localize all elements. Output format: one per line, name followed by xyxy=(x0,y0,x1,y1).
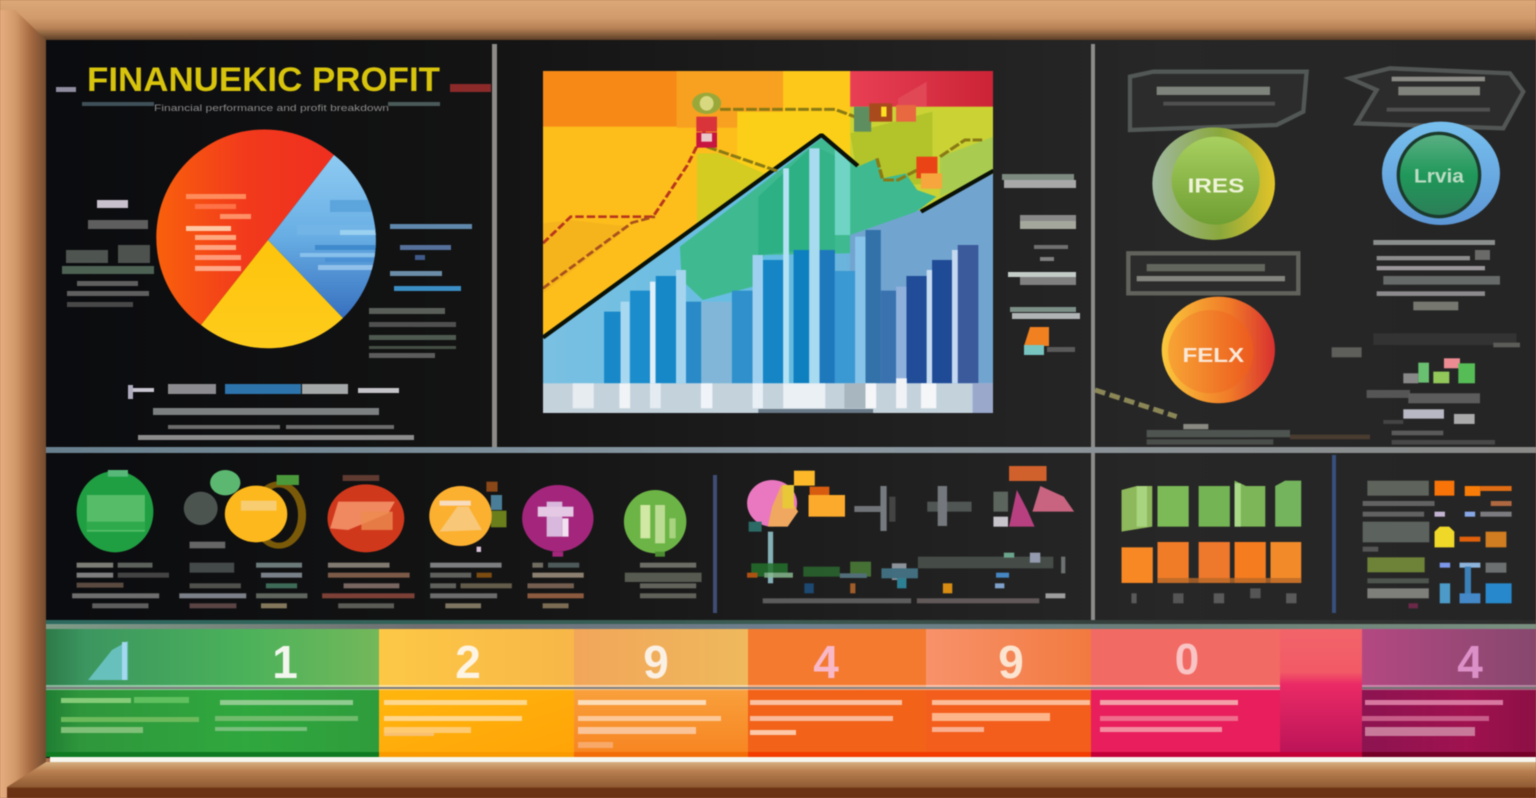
icon: pink bar and orange marker xyxy=(1009,466,1074,527)
green mountain xyxy=(680,138,936,300)
step 2 yellow: 2 xyxy=(455,636,481,688)
trend line and footnote xyxy=(1095,390,1370,445)
orange bars xyxy=(1122,542,1301,583)
bars xyxy=(604,148,978,383)
label xyxy=(179,563,307,608)
subtitle: Financial performance and profit breakdown xyxy=(154,103,389,113)
panel: mixed chart xyxy=(747,466,1074,603)
step divider line xyxy=(46,685,1536,690)
label xyxy=(430,563,512,608)
panel: main area and bar chart xyxy=(543,71,994,414)
panel: green and orange bars xyxy=(1122,481,1301,603)
step 3 orange xyxy=(574,629,748,757)
panel: numbered steps band xyxy=(46,629,1536,757)
green bars xyxy=(1122,481,1301,532)
icon: green badge xyxy=(1152,127,1275,240)
icon: orange badge: FELX xyxy=(1182,345,1245,367)
red line 1 xyxy=(543,127,707,243)
step 8 magenta: 4 xyxy=(1457,636,1483,688)
heading: title: FINANUEKIC PROFIT xyxy=(87,61,440,99)
chart markers xyxy=(692,93,942,189)
pie labels: right xyxy=(369,224,472,358)
label xyxy=(72,563,169,608)
icon: amber circle with accents xyxy=(184,470,302,548)
label xyxy=(527,563,584,608)
lower multi-colour chart xyxy=(747,553,1065,603)
badge label box 3 xyxy=(1128,253,1298,293)
mini chart xyxy=(1332,333,1520,445)
black trend line xyxy=(543,135,994,338)
chart background bands xyxy=(542,70,994,336)
badge label box 2 xyxy=(1350,68,1523,128)
legend icons xyxy=(1408,481,1512,608)
step 1 green: 1 xyxy=(272,636,298,688)
step 3 orange: 9 xyxy=(643,636,669,688)
icon: purple circle xyxy=(522,485,594,557)
icon: blue and green badge xyxy=(1382,122,1500,225)
chart side labels xyxy=(1002,174,1080,355)
olive line xyxy=(707,109,982,180)
icon: red circle xyxy=(327,475,404,552)
icon: pink pie xyxy=(747,471,845,532)
text block xyxy=(1373,240,1500,310)
step 7 gradient xyxy=(1280,629,1362,752)
step 5 coral: 9 xyxy=(998,636,1024,688)
badge label box 1 xyxy=(1130,72,1307,130)
bar stems and crosses xyxy=(768,486,1008,583)
step 6 pink xyxy=(1091,629,1362,757)
icon: light green circle xyxy=(624,490,686,557)
panel: indicator badges xyxy=(1095,68,1523,445)
red line 2 xyxy=(543,217,655,288)
chart base band xyxy=(543,378,994,414)
step 4 deep orange: 4 xyxy=(813,636,839,688)
white ledge xyxy=(50,757,1536,762)
icon: orange circle with accents xyxy=(429,482,506,552)
panel: pie chart xyxy=(56,61,491,440)
pie caption xyxy=(128,384,414,440)
step 5 coral xyxy=(926,629,1091,757)
step 2 yellow xyxy=(379,629,574,757)
subtitle xyxy=(82,102,440,113)
icon: orange badge xyxy=(1162,297,1275,403)
panel: legend xyxy=(1363,481,1512,608)
step 6 pink: 0 xyxy=(1175,635,1199,684)
icon: blue and green badge: Lrvia xyxy=(1414,167,1464,188)
label xyxy=(625,563,702,598)
label xyxy=(322,563,415,608)
pie labels: left xyxy=(62,200,154,307)
pie chart xyxy=(156,129,382,348)
blue area xyxy=(542,137,992,384)
dividers xyxy=(46,44,1536,629)
panel: category circles row xyxy=(72,470,702,608)
legend text blocks xyxy=(1363,481,1435,598)
step 1 green xyxy=(46,629,379,757)
axis ticks xyxy=(1131,588,1297,603)
icon: green badge: IRES xyxy=(1188,175,1244,198)
step 8 magenta xyxy=(1362,629,1536,757)
step 4 deep orange xyxy=(748,629,926,757)
icon: green circle xyxy=(77,470,153,552)
